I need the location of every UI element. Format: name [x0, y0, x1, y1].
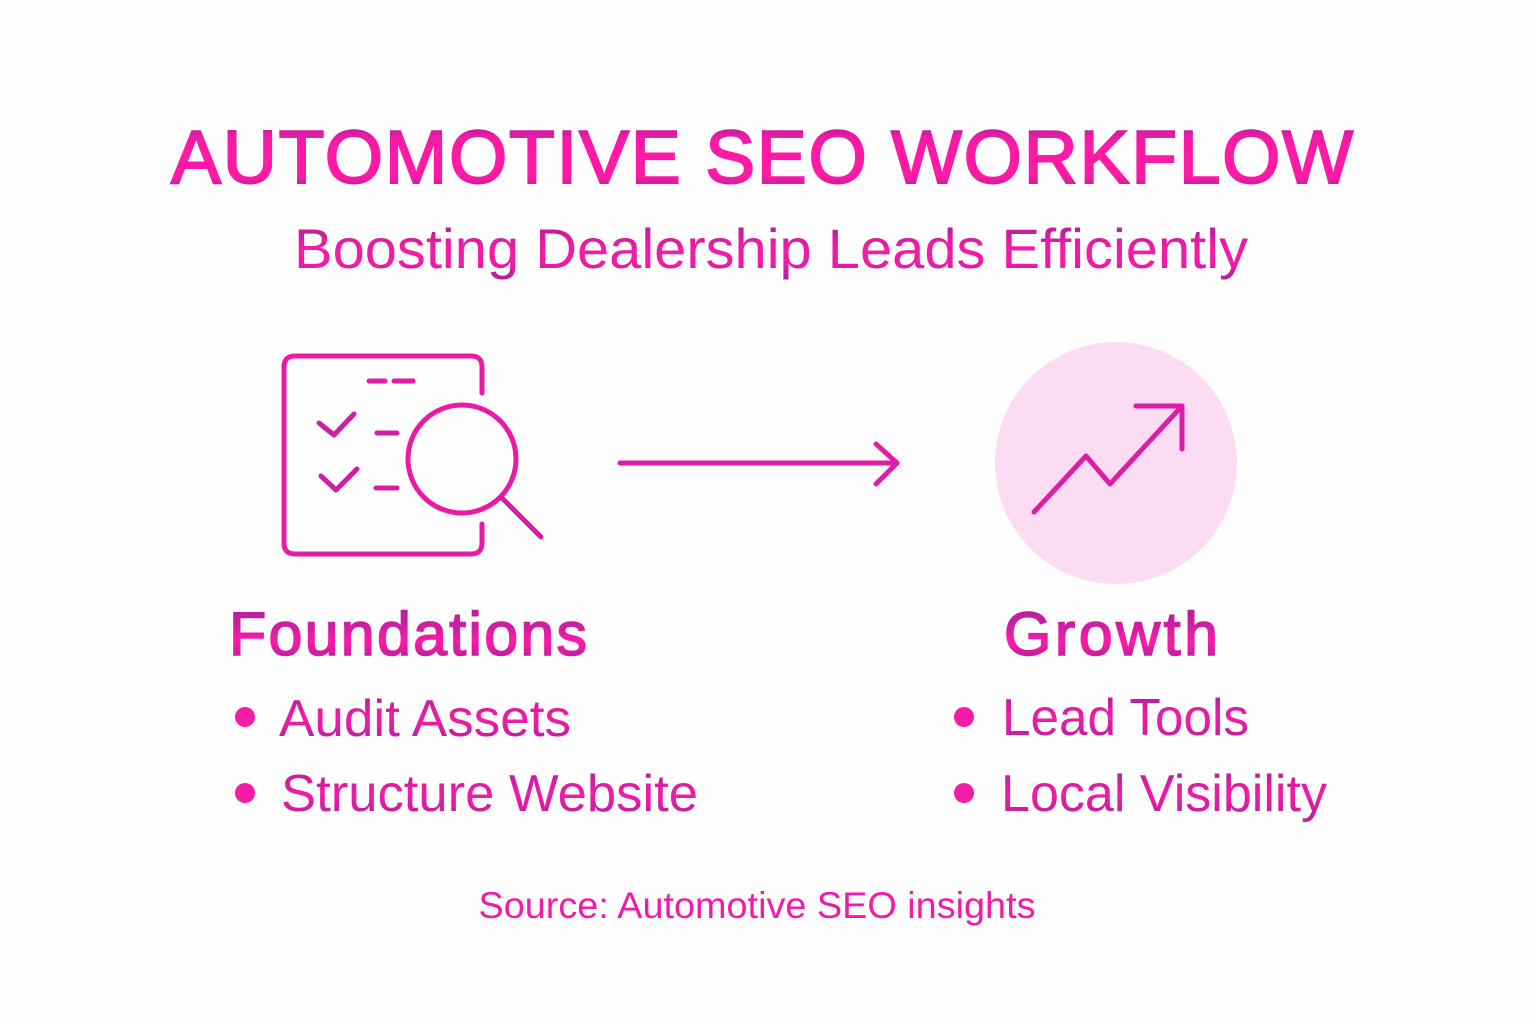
heading: growth: Growth — [1004, 600, 1218, 668]
bullet list: growth — [954, 689, 1327, 823]
title: AUTOMOTIVE SEO WORKFLOW — [171, 115, 1353, 199]
subtitle: Boosting Dealership Leads Efficiently — [294, 217, 1248, 280]
icon: checklist with magnifying glass — [284, 356, 541, 554]
panel: growth — [954, 600, 1327, 823]
icon: growth chart in circle — [995, 342, 1237, 584]
bullet list: foundations — [235, 690, 698, 823]
bullet list: growth: Local Visibility — [1001, 765, 1327, 823]
heading: foundations: Foundations — [229, 600, 587, 668]
bullet list: foundations: Audit Assets — [279, 690, 571, 748]
arrow — [620, 444, 897, 484]
bullet list: growth: Lead Tools — [1002, 689, 1249, 747]
source note: Source: Automotive SEO insights — [478, 885, 1036, 926]
bullet list: foundations: Structure Website — [281, 765, 698, 823]
panel: foundations — [229, 600, 698, 823]
